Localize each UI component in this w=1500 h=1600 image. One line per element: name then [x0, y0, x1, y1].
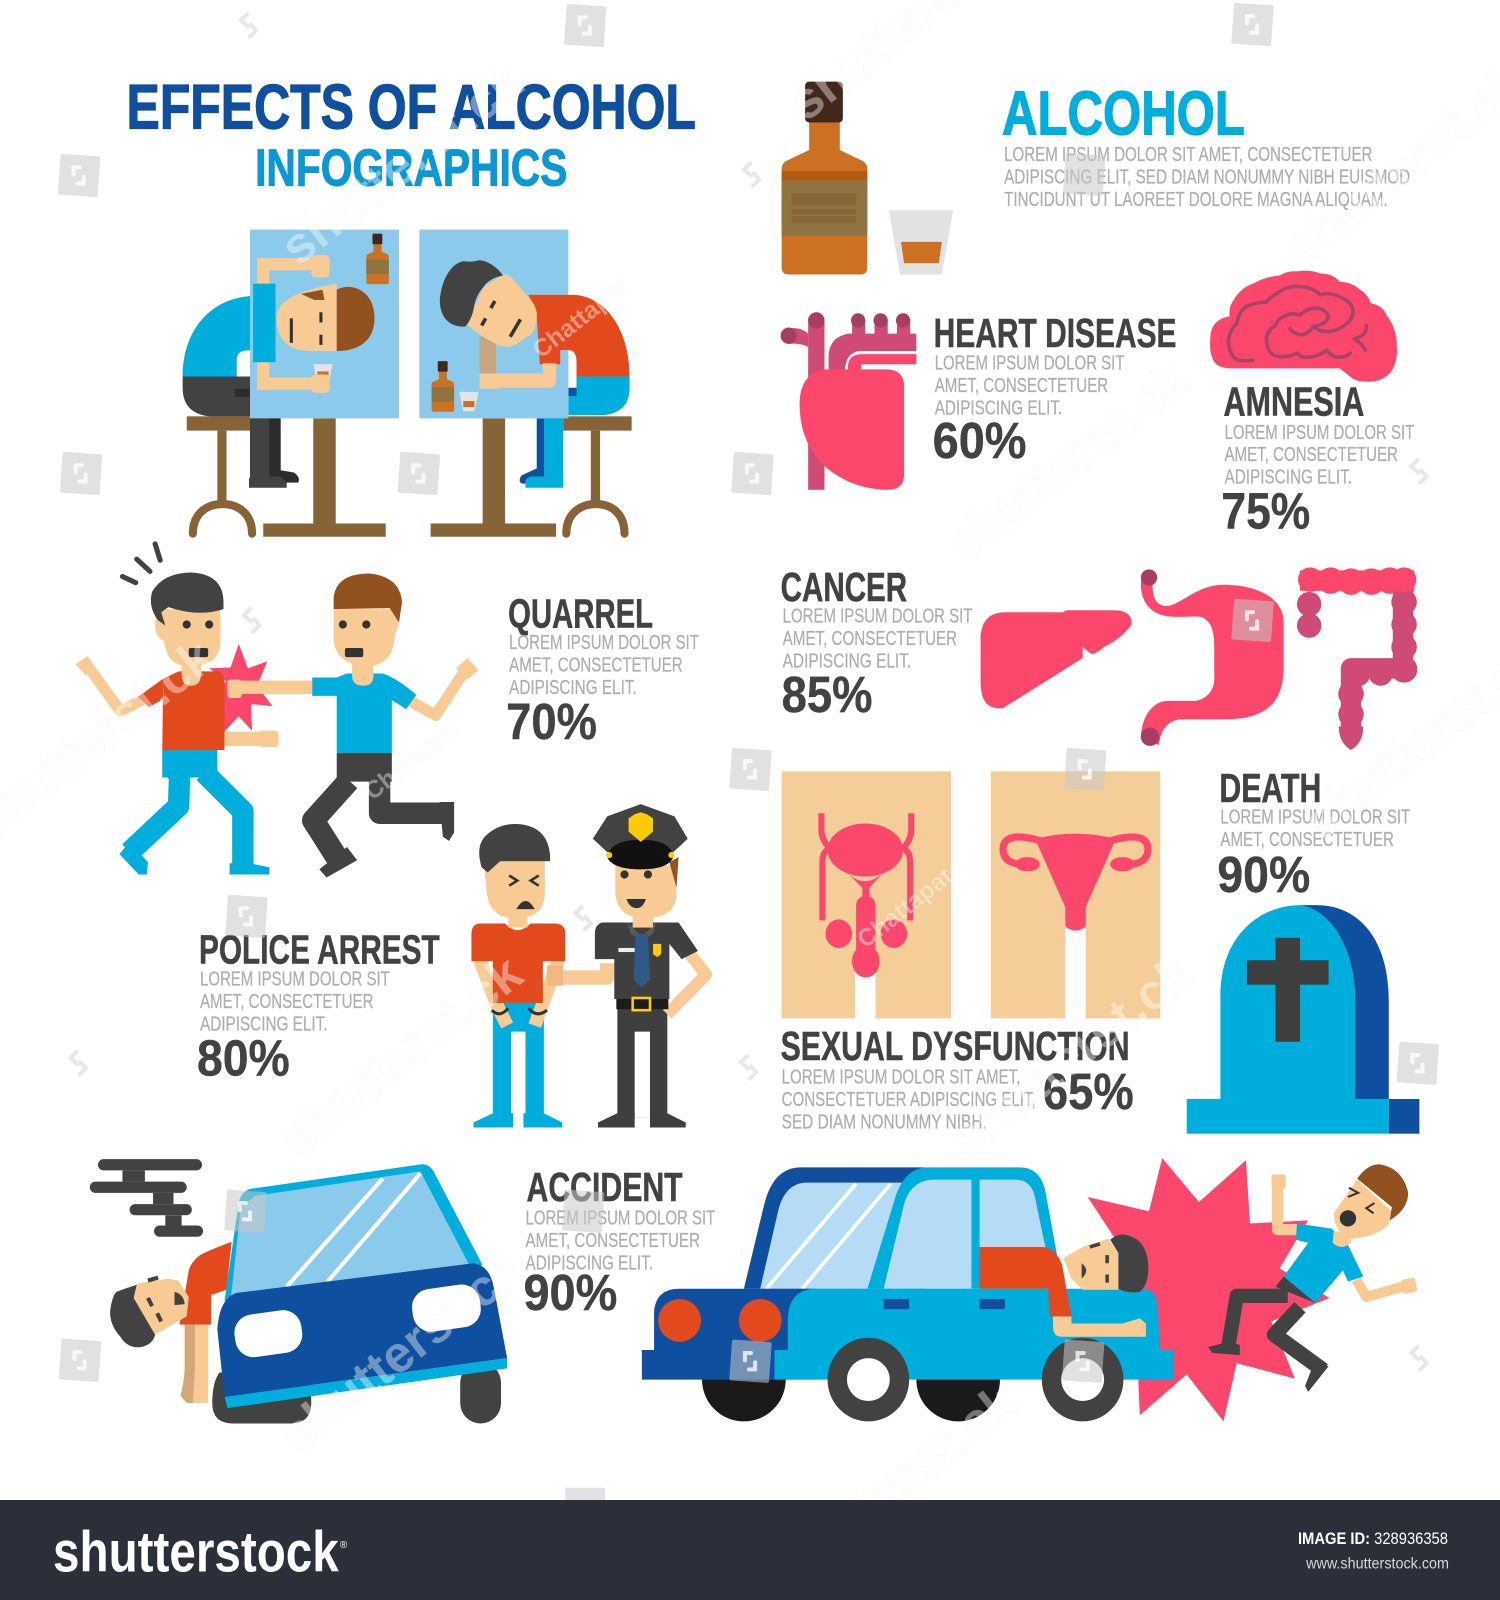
- illustration: two drunk men at tables: [183, 230, 632, 537]
- illustration: car collision: [642, 1158, 1418, 1421]
- icon: brain: [1210, 271, 1397, 382]
- text: sexual dysfunction: LOREM IPSUM DOLOR SIT AMET,: [782, 1067, 1020, 1089]
- text: police arrest: POLICE ARREST: [199, 926, 440, 972]
- policeman: [547, 804, 706, 1128]
- text: police arrest: [197, 926, 440, 1087]
- icon: heart: [781, 312, 916, 490]
- illustration: quarrel figures: [76, 544, 479, 878]
- watermarks: shutterst.ck: [270, 1239, 533, 1463]
- cyan front car: [774, 1167, 1173, 1421]
- illustration: crashed car with man: [110, 1164, 507, 1423]
- text: cancer: CANCER: [781, 564, 907, 610]
- text: sexual dysfunction: CONSECTETUER ADIPISCING ELIT,: [782, 1089, 1036, 1111]
- text: sexual dysfunction: SED DIAM NONUMMY NIBH.: [782, 1112, 987, 1134]
- text: death: [1217, 765, 1410, 903]
- panel: sexual organs: [782, 771, 1160, 1018]
- alcohol heading and text: [1002, 80, 1410, 211]
- text: quarrel: ADIPISCING ELIT.: [509, 677, 637, 699]
- collision star: [1088, 1158, 1330, 1421]
- right man legs: [520, 377, 630, 488]
- text: quarrel: AMET, CONSECTETUER: [509, 654, 683, 676]
- icon: colon: [1297, 567, 1417, 750]
- text: heart disease: HEART DISEASE: [934, 310, 1177, 356]
- car windshield: [224, 1164, 483, 1301]
- text: accident: ACCIDENT: [527, 1164, 683, 1210]
- watermarks: shutterst.ck: [270, 943, 533, 1167]
- right man: [228, 573, 479, 878]
- text: accident: ADIPISCING ELIT.: [526, 1252, 653, 1274]
- text: death: AMET, CONSECTETUER: [1220, 829, 1394, 851]
- left man: [76, 544, 279, 874]
- small bottle right: [432, 361, 454, 412]
- text: accident: 90%: [523, 1264, 617, 1321]
- site url: www.shutterstock.com: [1305, 1555, 1449, 1572]
- dark blue rear car: [642, 1167, 1000, 1421]
- text: accident: LOREM IPSUM DOLOR SIT: [526, 1207, 715, 1229]
- rear tire: [212, 1372, 311, 1423]
- watermarks: shutterst.ck: [936, 350, 1199, 573]
- text: death: LOREM IPSUM DOLOR SIT: [1220, 806, 1410, 828]
- title: EFFECTS OF ALCOHOL: [127, 73, 696, 143]
- small glass right: [459, 392, 479, 411]
- text: amnesia: LOREM IPSUM DOLOR SIT: [1224, 422, 1414, 444]
- illustration: police arrest: [471, 804, 706, 1128]
- text: quarrel: LOREM IPSUM DOLOR SIT: [509, 632, 699, 654]
- text: heart disease: [933, 310, 1177, 469]
- female panel: [991, 771, 1160, 1018]
- text: amnesia: ADIPISCING ELIT.: [1224, 467, 1352, 489]
- text: sexual dysfunction: [781, 1023, 1134, 1134]
- impact star: [201, 644, 272, 733]
- right man body and head: [440, 260, 630, 389]
- icon: smoke: [90, 1159, 203, 1237]
- text: heart disease: LOREM IPSUM DOLOR SIT: [935, 352, 1124, 374]
- text: sexual dysfunction: SEXUAL DYSFUNCTION: [781, 1023, 1130, 1069]
- right table top: [419, 230, 568, 418]
- text: police arrest: ADIPISCING ELIT.: [200, 1014, 328, 1036]
- text: police arrest: LOREM IPSUM DOLOR SIT: [200, 969, 390, 991]
- text: accident: AMET, CONSECTETUER: [526, 1230, 700, 1252]
- prisoner: [471, 824, 565, 1128]
- footer bar: [0, 1500, 1500, 1600]
- left table top: [250, 230, 399, 418]
- man hanging out: [110, 1242, 232, 1403]
- shutterstock logo: shutterstock: [53, 1520, 339, 1584]
- text: police arrest: 80%: [197, 1030, 290, 1087]
- text: death: DEATH: [1219, 765, 1321, 811]
- watermarks: shutterst.ck: [270, 53, 533, 276]
- car bonnet: [217, 1263, 507, 1397]
- alcohol heading and text: ALCOHOL: [1002, 80, 1245, 149]
- man on car: [980, 1235, 1148, 1337]
- watermarks: Chattapat: [528, 273, 633, 364]
- left man body: [183, 296, 299, 488]
- flying man: [1208, 1164, 1418, 1392]
- left man arms and head: [253, 255, 374, 393]
- image id: IMAGE ID: 328936358: [1298, 1530, 1448, 1548]
- text: accident: [523, 1164, 715, 1321]
- title: INFOGRAPHICS: [255, 140, 567, 198]
- watermarks: shutterst.ck: [939, 943, 1202, 1167]
- text: cancer: LOREM IPSUM DOLOR SIT: [783, 605, 972, 627]
- left stool and table: [187, 416, 386, 537]
- title: [127, 73, 696, 198]
- small bottle left: [366, 234, 389, 284]
- icon: liver: [981, 610, 1132, 708]
- text: police arrest: AMET, CONSECTETUER: [200, 991, 373, 1013]
- text: quarrel: [506, 591, 699, 750]
- text: heart disease: 60%: [933, 412, 1027, 469]
- text: quarrel: QUARREL: [508, 591, 653, 637]
- text: quarrel: 70%: [506, 693, 597, 750]
- text: cancer: ADIPISCING ELIT.: [783, 650, 911, 672]
- alcohol heading and text: LOREM IPSUM DOLOR SIT AMET, CONSECTETUER: [1004, 144, 1372, 166]
- text: amnesia: 75%: [1221, 483, 1310, 540]
- text: sexual dysfunction: 65%: [1043, 1063, 1134, 1120]
- icon: gravestone: [1187, 905, 1419, 1134]
- icon: whisky bottle and glass: [782, 82, 953, 274]
- watermarks: shutterst.ck: [764, 1372, 1027, 1595]
- text: amnesia: AMET, CONSECTETUER: [1224, 444, 1398, 466]
- text: cancer: AMET, CONSECTETUER: [783, 628, 957, 650]
- text: heart disease: AMET, CONSECTETUER: [935, 375, 1108, 397]
- right stool and table: [431, 416, 632, 537]
- text: amnesia: [1221, 378, 1414, 540]
- text: death: 90%: [1217, 846, 1310, 903]
- text: amnesia: AMNESIA: [1223, 378, 1364, 424]
- text: cancer: [781, 564, 972, 723]
- registered mark: ®: [340, 1540, 348, 1551]
- icon: stomach: [1141, 569, 1284, 746]
- male panel: [782, 771, 951, 1018]
- text: heart disease: ADIPISCING ELIT.: [935, 397, 1062, 419]
- watermarks: Chattapat: [360, 715, 465, 806]
- text: cancer: 85%: [782, 666, 872, 723]
- watermarks: Chattapat: [852, 863, 958, 954]
